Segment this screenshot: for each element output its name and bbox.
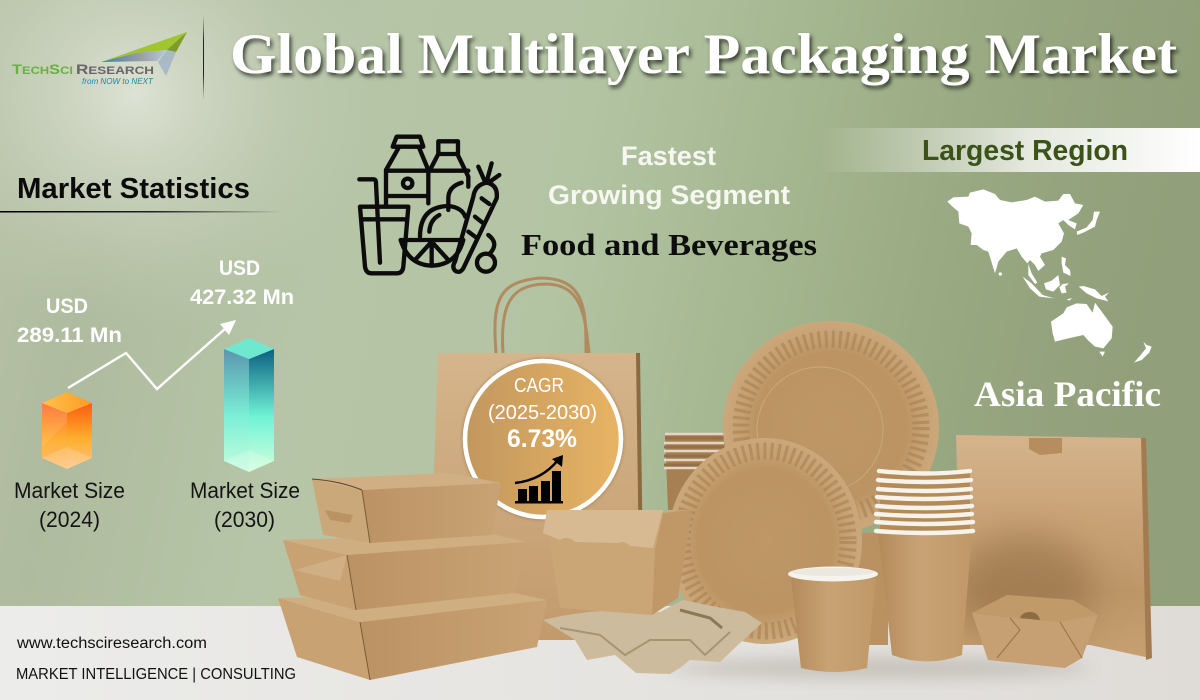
table surface bbox=[0, 606, 1200, 700]
bar: 2024 bbox=[42, 392, 92, 469]
logo divider bbox=[203, 15, 204, 100]
label: market size 2024 bbox=[14, 478, 125, 532]
background highlight bbox=[0, 0, 420, 340]
stat: 2024 value: 289.11 Mn bbox=[17, 323, 122, 347]
stat: 2030 value: USD bbox=[219, 256, 260, 280]
small cup bbox=[788, 566, 878, 672]
CAGR badge bbox=[465, 361, 621, 517]
footer: tagline: MARKET INTELLIGENCE | CONSULTING bbox=[16, 666, 296, 683]
front takeaway box bbox=[543, 510, 692, 615]
stat: 2030 value bbox=[190, 256, 294, 309]
text: fastest growing segment: Fastest bbox=[621, 141, 716, 171]
icon: food and beverages bbox=[359, 137, 499, 273]
text: food and beverages: Food and Beverages bbox=[521, 227, 817, 262]
stat: 2024 value: USD bbox=[46, 294, 88, 318]
text: fastest growing segment bbox=[548, 141, 790, 210]
market statistics underline bbox=[0, 211, 282, 212]
product photo: kraft packaging bbox=[433, 278, 1152, 678]
logo: TechSci Research: RESEARCH bbox=[76, 61, 154, 77]
footer: website: www.techsciresearch.com bbox=[16, 635, 207, 652]
label: market size 2030: (2030) bbox=[214, 507, 275, 532]
boxes stack bbox=[278, 473, 692, 680]
stat: 2030 value: 427.32 Mn bbox=[190, 285, 294, 309]
wall cup stack bbox=[664, 434, 725, 510]
label: asia pacific: Asia Pacific bbox=[974, 374, 1161, 414]
top box bbox=[312, 473, 501, 543]
label: market size 2024: Market Size bbox=[14, 478, 125, 503]
text: fastest growing segment: Growing Segment bbox=[548, 180, 790, 210]
bar: 2030 bbox=[224, 338, 274, 472]
CAGR value: 6.73% bbox=[507, 425, 577, 453]
title: Global Multilayer Packaging Market bbox=[230, 23, 1177, 86]
back plate bbox=[723, 321, 939, 533]
heading: market statistics: Market Statistics bbox=[17, 173, 250, 205]
front plate bbox=[668, 438, 862, 644]
map: asia pacific bbox=[947, 189, 1152, 363]
tall cup stack bbox=[876, 471, 973, 662]
right shopping bag bbox=[955, 435, 1152, 660]
logo: TechSci Research: TECH SCI bbox=[12, 61, 73, 77]
CAGR label: CAGR bbox=[514, 375, 564, 397]
logo: TechSci Research bbox=[12, 32, 187, 86]
CAGR label: (2025-2030) bbox=[488, 402, 597, 424]
CAGR label bbox=[488, 375, 597, 424]
stat: 2024 value bbox=[17, 294, 122, 347]
icon: growth chart bbox=[515, 455, 563, 504]
egg tray carrier bbox=[543, 600, 762, 674]
middle box bbox=[283, 534, 527, 610]
largest region banner bbox=[820, 128, 1200, 172]
growth arrow bbox=[68, 320, 236, 389]
label: market size 2024: (2024) bbox=[39, 507, 100, 532]
label: market size 2030 bbox=[190, 478, 300, 532]
small folded box bbox=[972, 595, 1098, 668]
paper bag with rope handles bbox=[433, 278, 644, 640]
bottom box bbox=[278, 593, 547, 680]
carton behind plates bbox=[858, 533, 888, 645]
label: market size 2030: Market Size bbox=[190, 478, 300, 503]
logo: TechSci Research: from NOW to NEXT bbox=[82, 76, 154, 86]
floor shadow bbox=[670, 658, 1090, 678]
heading: largest region: Largest Region bbox=[922, 135, 1128, 167]
